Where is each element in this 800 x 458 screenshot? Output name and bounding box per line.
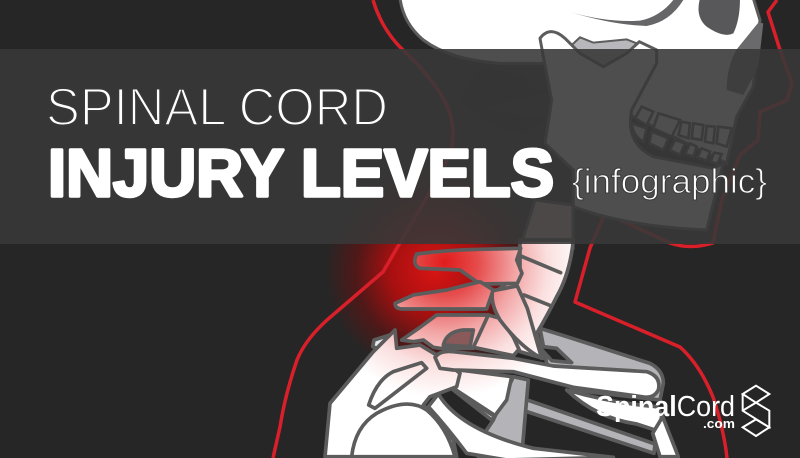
eye socket [698,0,740,35]
logo [596,386,769,436]
skull base shadow [460,67,550,135]
cranium [400,0,760,163]
lower transverse process [395,282,493,309]
cervical column [493,240,573,358]
lower white rib [428,394,613,458]
red glow behind injured vertebrae [325,160,545,380]
jaw joint shadow [570,37,637,67]
humerus head [352,404,455,457]
title band [0,49,800,244]
dark rib lines [455,390,493,415]
rib opening [443,330,473,347]
title line 2: INJURY LEVELS [48,136,554,211]
red body outline [273,0,792,458]
grey rib [507,394,655,453]
infographic tag: {infographic} [572,163,767,201]
grey sternum [478,377,528,457]
first rib arch [402,315,488,348]
lower scapula blade [567,390,662,432]
right rib bar [653,417,678,457]
gap between ribs [538,346,572,363]
upper transverse process [415,248,522,284]
thoracic cavity [480,382,653,457]
clavicle [435,351,659,397]
logo domain: .com [703,416,735,431]
neck vertebrae behind band [520,200,573,248]
skeleton: ribs, shoulder, cervical spine [325,240,678,458]
rear scapula, grey [540,328,663,400]
triangular vertebra body [473,315,521,356]
logo wordmark: SpinalCord [596,391,735,423]
intervertebral disc lines [521,256,561,306]
logo icon [743,386,769,436]
spinous process [492,286,542,358]
teeth [632,107,732,164]
skull [400,0,763,230]
mandible [540,32,723,230]
main shoulder body [325,330,460,457]
acromion leaf [369,363,427,408]
upper thoracic fill [453,370,512,420]
upper-left small bone [373,333,395,348]
nasal shadow [727,23,763,95]
cheekbone line [570,0,683,26]
title line 1: SPINAL CORD [46,78,388,137]
